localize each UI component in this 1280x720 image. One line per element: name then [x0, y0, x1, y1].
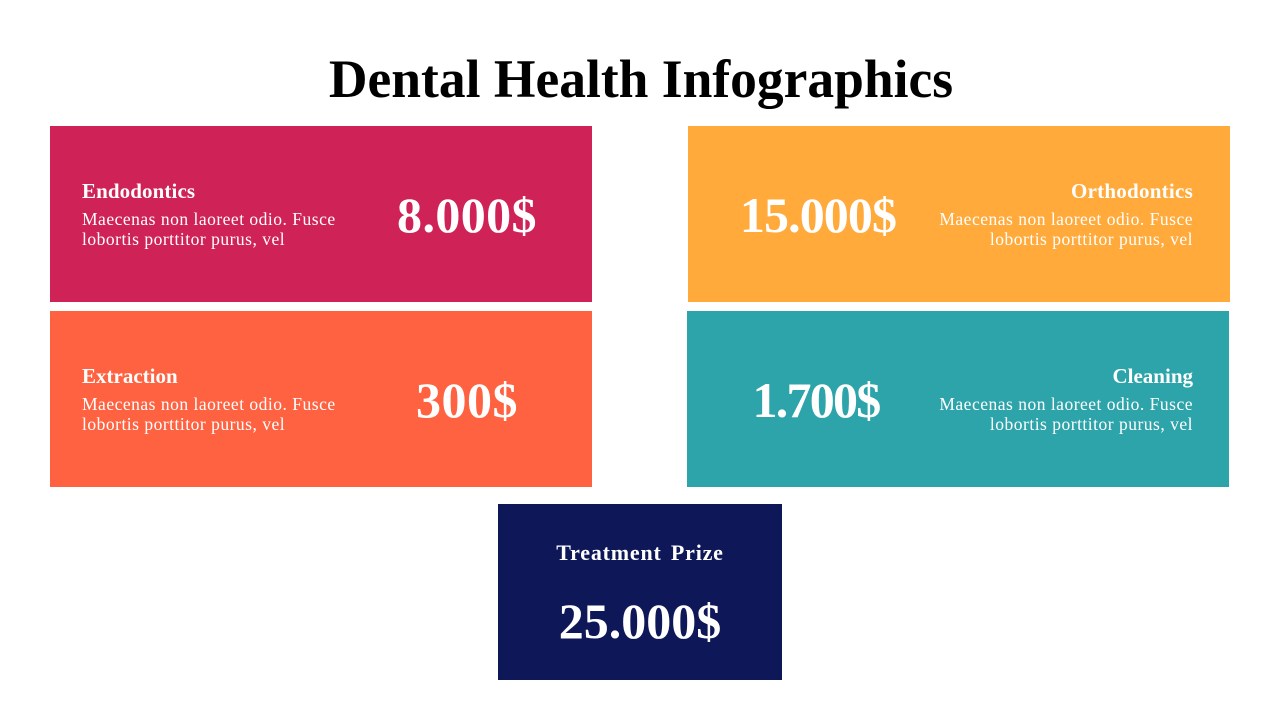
description: extraction: lobortis porttitor purus, vel — [82, 414, 285, 434]
heading: treatment prize: Treatment Prize — [556, 540, 724, 565]
description: cleaning: lobortis porttitor purus, vel — [990, 414, 1193, 434]
value: extraction: 300$ — [416, 372, 518, 428]
description: endodontics: lobortis porttitor purus, vel — [82, 229, 285, 249]
description: cleaning — [939, 394, 1193, 434]
description: orthodontics: lobortis porttitor purus, vel — [990, 229, 1193, 249]
panel: endodontics — [50, 126, 592, 302]
heading: cleaning: Cleaning — [1112, 364, 1193, 388]
value: orthodontics: 15.000$ — [740, 187, 896, 243]
description: extraction: Maecenas non laoreet odio. Fusce — [82, 394, 336, 414]
description: extraction — [82, 394, 336, 434]
description: endodontics: Maecenas non laoreet odio. Fusce — [82, 209, 336, 229]
description: endodontics — [82, 209, 336, 249]
heading: orthodontics: Orthodontics — [1071, 179, 1193, 203]
value: cleaning: 1.700$ — [752, 372, 880, 428]
panel: orthodontics — [688, 126, 1230, 302]
value: endodontics: 8.000$ — [397, 187, 537, 243]
heading: extraction: Extraction — [82, 364, 178, 388]
title: Dental Health Infographics — [329, 49, 953, 109]
value: total: 25.000$ — [559, 593, 721, 649]
heading: endodontics: Endodontics — [82, 179, 195, 203]
panel: treatment prize total — [498, 504, 782, 680]
description: orthodontics — [939, 209, 1193, 249]
panel: cleaning — [687, 311, 1229, 487]
panel: extraction — [50, 311, 592, 487]
description: cleaning: Maecenas non laoreet odio. Fusce — [939, 394, 1193, 414]
description: orthodontics: Maecenas non laoreet odio. Fusce — [939, 209, 1193, 229]
